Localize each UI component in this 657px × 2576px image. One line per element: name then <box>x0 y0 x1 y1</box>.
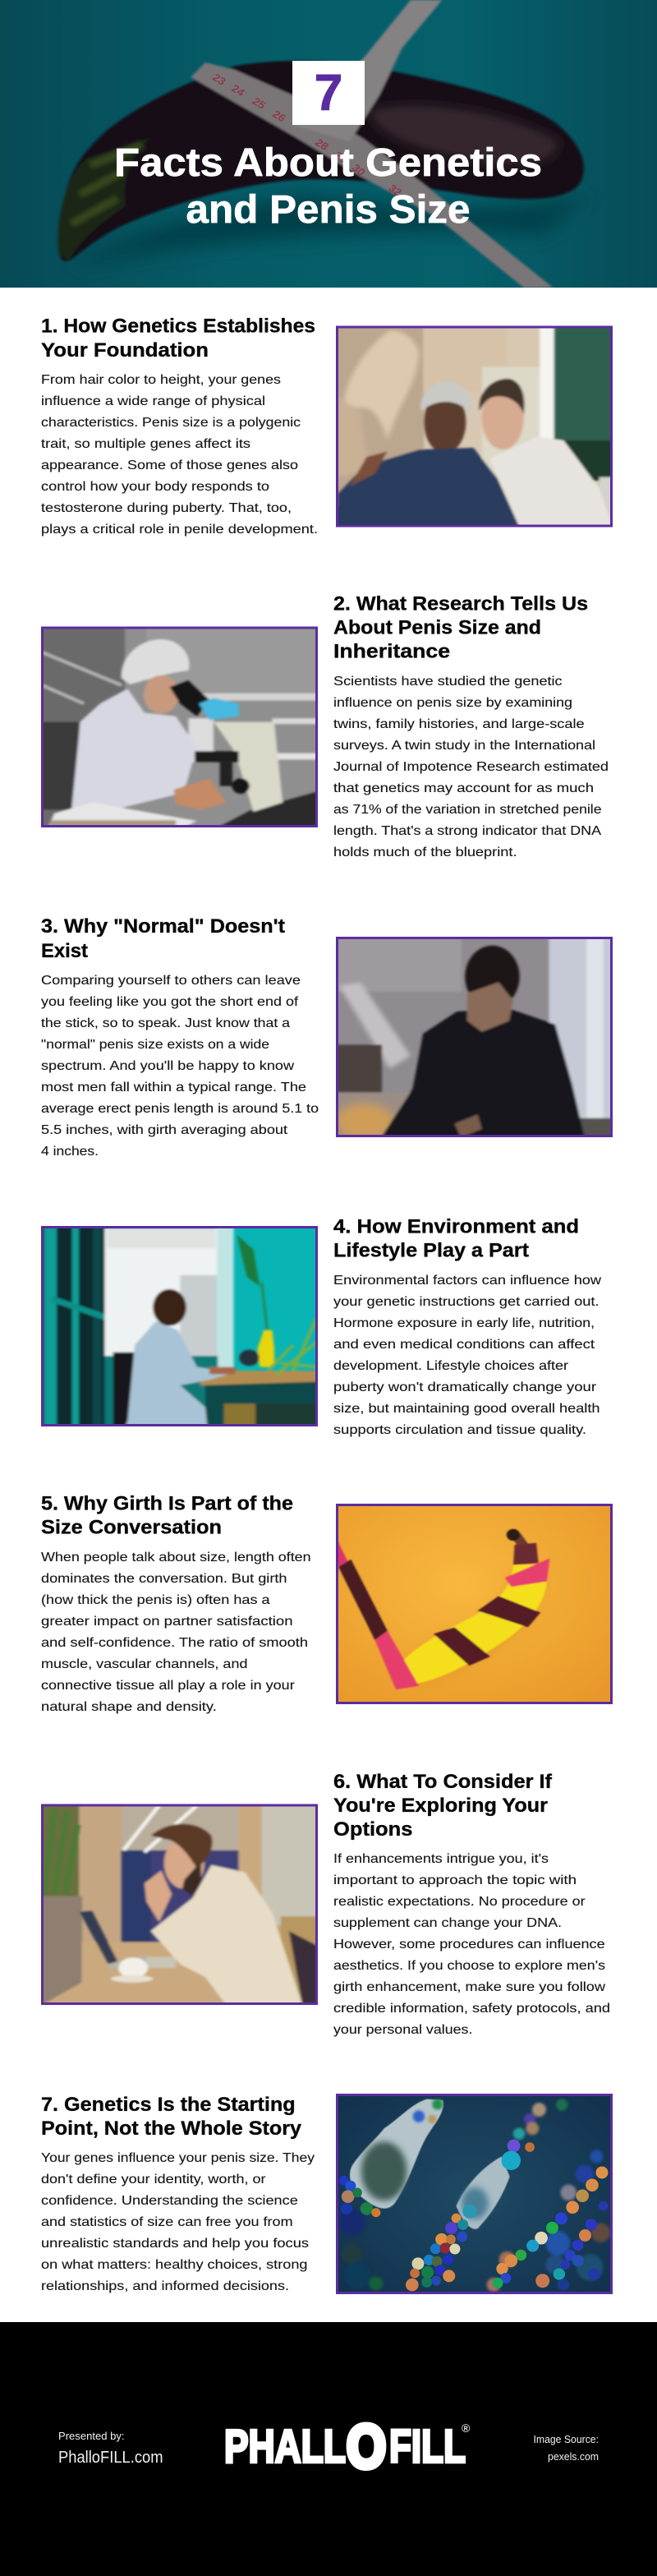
body text: fact 7: Your genes influence your penis size. They <box>41 2151 315 2165</box>
panel: fact 1 <box>41 316 613 537</box>
header photo: eggplant and measuring tape: 29 <box>332 149 350 165</box>
presented by: Presented by: <box>58 2430 125 2442</box>
body text: fact 4: Environmental factors can influence how <box>333 1274 602 1288</box>
header photo: eggplant and measuring tape: 25 <box>250 95 269 112</box>
header photo: eggplant and measuring tape: 32 <box>386 182 404 198</box>
title <box>114 141 542 232</box>
header photo: eggplant and measuring tape: 26 <box>270 108 288 124</box>
heading: fact 6 <box>333 1771 553 1841</box>
heading: fact 1: Your Foundation <box>41 339 209 362</box>
header photo: eggplant and measuring tape: 30 <box>349 162 368 178</box>
heading: fact 7 <box>41 2094 302 2140</box>
title: and Penis Size <box>186 188 470 232</box>
body text: fact 4: Hormone exposure in early life, nutrition, <box>333 1316 595 1330</box>
body text: fact 2: Scientists have studied the genetic <box>333 675 563 689</box>
panel: fact 6 <box>41 1771 610 2037</box>
body text: fact 1: testosterone during puberty. That, too, <box>41 501 292 515</box>
body text: fact 1: plays a critical role in penile development. <box>41 523 318 537</box>
heading: fact 4: 4. How Environment and <box>333 1215 579 1237</box>
body text: fact 6: girth enhancement, make sure you follow <box>333 1980 605 1994</box>
body text: fact 7 <box>41 2151 315 2293</box>
body text: fact 3: you feeling like you got the short end of <box>41 995 299 1009</box>
body text: fact 7: confidence. Understanding the science <box>41 2194 298 2208</box>
photo: stressed man at laptop <box>41 1804 318 2005</box>
body text: fact 1: influence a wide range of physical <box>41 394 265 408</box>
logo: FILL <box>389 2421 466 2473</box>
photo: scientist at microscope <box>41 626 318 827</box>
body text: fact 5: greater impact on partner satisfaction <box>41 1615 293 1629</box>
logo <box>224 2412 471 2481</box>
presented by <box>58 2430 163 2467</box>
heading: fact 1: 1. How Genetics Establishes <box>41 316 315 337</box>
image source: pexels.com <box>548 2451 599 2463</box>
body text: fact 5: natural shape and density. <box>41 1700 217 1714</box>
body text: fact 3: average erect penis length is around 5.1 to <box>41 1102 319 1116</box>
logo: ® <box>462 2422 471 2435</box>
body text: fact 4: development. Lifestyle choices after <box>333 1359 569 1373</box>
body text: fact 2: influence on penis size by examining <box>333 696 572 710</box>
logo: PHALL <box>224 2421 346 2473</box>
body text: fact 6: credible information, safety protocols, and <box>333 2002 610 2016</box>
body text: fact 3: "normal" penis size exists on a wide <box>41 1038 269 1052</box>
body text: fact 7: relationships, and informed decisions. <box>41 2279 289 2293</box>
image source: Image Source: <box>534 2434 599 2445</box>
body text: fact 5: muscle, vascular channels, and <box>41 1657 248 1671</box>
heading: fact 2 <box>333 592 588 662</box>
body text: fact 5: (how thick the penis is) often has a <box>41 1593 270 1607</box>
body text: fact 5: and self-confidence. The ratio of smooth <box>41 1636 308 1650</box>
body text: fact 1: control how your body responds to <box>41 480 269 494</box>
logo: O <box>347 2412 386 2481</box>
heading: fact 3: 3. Why "Normal" Doesn't <box>41 915 285 938</box>
body text: fact 1 <box>41 373 318 537</box>
photo: man at desk in teal office <box>41 1226 318 1426</box>
body text: fact 2 <box>333 675 609 859</box>
heading: fact 2: Inheritance <box>333 640 450 662</box>
body text: fact 3: Comparing yourself to others can leave <box>41 974 301 988</box>
heading: fact 6: You're Exploring Your <box>333 1795 548 1817</box>
header photo: eggplant and measuring tape: 23 <box>210 71 228 87</box>
heading: fact 2: 2. What Research Tells Us <box>333 592 588 615</box>
panel: fact 3 <box>41 915 613 1159</box>
panel: fact 2 <box>41 592 609 859</box>
body text: fact 6: important to approach the topic with <box>333 1873 577 1887</box>
title: Facts About Genetics <box>114 141 542 185</box>
photo: banana with measuring tape <box>336 1504 613 1704</box>
body text: fact 1: From hair color to height, your genes <box>41 373 281 387</box>
heading: fact 5: 5. Why Girth Is Part of the <box>41 1492 293 1515</box>
heading: fact 1 <box>41 316 315 362</box>
heading: fact 5: Size Conversation <box>41 1517 222 1538</box>
heading: fact 5 <box>41 1492 293 1538</box>
photo: DNA bead strands <box>336 2094 613 2294</box>
body text: fact 2: Journal of Impotence Research estimated <box>333 760 609 774</box>
body text: fact 1: characteristics. Penis size is a polygenic <box>41 416 301 430</box>
panel: fact 7 <box>41 2094 613 2294</box>
body text: fact 3: spectrum. And you'll be happy to know <box>41 1059 295 1073</box>
body text: fact 5: When people talk about size, length often <box>41 1551 311 1564</box>
body text: fact 3: 5.5 inches, with girth averaging about <box>41 1123 288 1137</box>
body text: fact 3: 4 inches. <box>41 1145 99 1159</box>
heading: fact 6: Options <box>333 1818 412 1841</box>
body text: fact 6: However, some procedures can influence <box>333 1938 605 1952</box>
panel: fact 5 <box>41 1492 613 1714</box>
body text: fact 7: unrealistic standards and help you focus <box>41 2237 309 2251</box>
heading: fact 3 <box>41 915 285 962</box>
body text: fact 1: trait, so multiple genes affect its <box>41 437 250 451</box>
body text: fact 2: length. That's a strong indicator that DNA <box>333 824 601 838</box>
body text: fact 4: size, but maintaining good overall health <box>333 1402 600 1416</box>
heading: fact 4: Lifestyle Play a Part <box>333 1239 529 1262</box>
heading: fact 4 <box>333 1215 579 1262</box>
body text: fact 2: as 71% of the variation in stretched penile <box>333 803 602 817</box>
body text: fact 7: and statistics of size can free you from <box>41 2215 293 2229</box>
body text: fact 6: supplement can change your DNA. <box>333 1916 562 1930</box>
header banner <box>0 0 657 288</box>
photo: man with head in hand <box>335 937 613 1141</box>
body text: fact 2: holds much of the blueprint. <box>333 846 517 859</box>
image source <box>534 2434 599 2463</box>
body text: fact 5: connective tissue all play a role in your <box>41 1679 295 1693</box>
body text: fact 7: don't define your identity, worth, or <box>41 2173 266 2187</box>
body text: fact 4: puberty won't dramatically change your <box>333 1380 597 1394</box>
heading: fact 3: Exist <box>41 940 88 962</box>
body text: fact 5: dominates the conversation. But girth <box>41 1572 287 1586</box>
presented by: PhalloFILL.com <box>58 2449 163 2467</box>
body text: fact 5 <box>41 1551 311 1714</box>
header photo: eggplant and measuring tape: 28 <box>313 136 331 153</box>
body text: fact 3: the stick, so to speak. Just know that a <box>41 1016 290 1030</box>
heading: fact 6: 6. What To Consider If <box>333 1771 553 1793</box>
body text: fact 6: aesthetics. If you choose to explore men's <box>333 1959 605 1973</box>
body text: fact 4: your genetic instructions get carried out. <box>333 1295 600 1309</box>
body text: fact 3: most men fall within a typical range. The <box>41 1081 306 1094</box>
heading: fact 7: Point, Not the Whole Story <box>41 2117 302 2140</box>
number badge: 7 <box>315 65 342 122</box>
body text: fact 1: appearance. Some of those genes also <box>41 459 298 472</box>
header photo: eggplant and measuring tape: 24 <box>229 82 247 99</box>
number badge <box>292 61 365 125</box>
heading: fact 2: About Penis Size and <box>333 616 541 638</box>
footer <box>0 2322 657 2576</box>
photo: older man and younger man <box>336 325 613 528</box>
body text: fact 4: supports circulation and tissue quality. <box>333 1423 586 1437</box>
body text: fact 2: that genetics may account for as much <box>333 781 594 795</box>
body text: fact 7: on what matters: healthy choices, strong <box>41 2258 307 2272</box>
body text: fact 6: your personal values. <box>333 2023 472 2037</box>
body text: fact 6 <box>333 1852 610 2037</box>
body text: fact 2: twins, family histories, and large-scale <box>333 717 585 731</box>
body text: fact 2: surveys. A twin study in the International <box>333 739 595 753</box>
header photo: eggplant and measuring tape <box>0 0 657 288</box>
body text: fact 3 <box>41 974 319 1159</box>
body text: fact 4 <box>333 1274 602 1437</box>
body text: fact 6: realistic expectations. No procedure or <box>333 1895 586 1909</box>
heading: fact 7: 7. Genetics Is the Starting <box>41 2094 296 2116</box>
body text: fact 4: and even medical conditions can affect <box>333 1338 595 1352</box>
body text: fact 6: If enhancements intrigue you, it's <box>333 1852 549 1866</box>
panel: fact 4 <box>41 1215 602 1437</box>
